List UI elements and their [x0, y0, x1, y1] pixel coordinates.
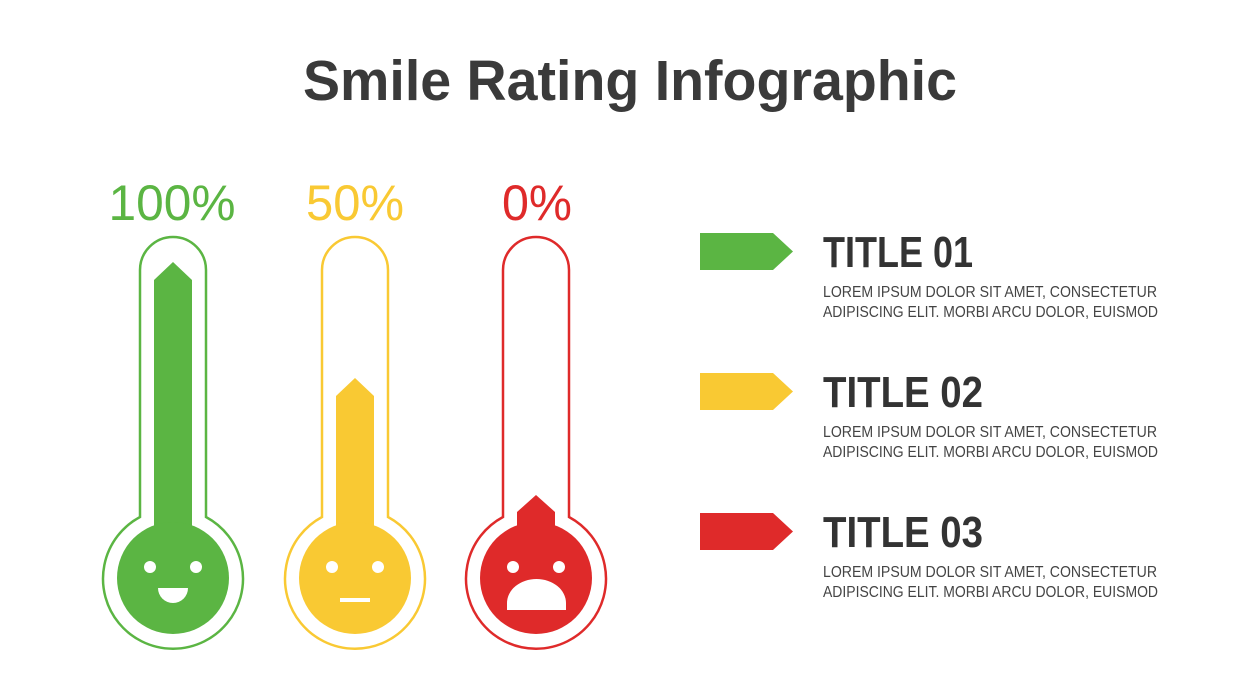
icon: neutral face	[326, 561, 384, 602]
item: title 01	[700, 228, 1158, 321]
item: title 02	[700, 368, 1158, 461]
item: title 03	[700, 508, 1158, 601]
label: 100%: 100%	[108, 175, 236, 231]
thermometer: green 100%	[103, 175, 243, 649]
item: title 03: ADIPISCING ELIT. MORBI ARCU DOLOR, EUISMOD	[823, 584, 1158, 601]
item: title 03: TITLE 03	[823, 508, 983, 557]
item: title 02: TITLE 02	[823, 368, 983, 417]
item: title 02: ADIPISCING ELIT. MORBI ARCU DOLOR, EUISMOD	[823, 444, 1158, 461]
item: title 01: TITLE 01	[823, 228, 973, 277]
icon: sad face	[507, 561, 566, 610]
icon: happy face	[144, 561, 202, 603]
title: Smile Rating Infographic	[303, 49, 957, 113]
thermometer: yellow 50%	[285, 175, 425, 649]
arrow: green	[700, 233, 793, 270]
arrow: red	[700, 513, 793, 550]
item: title 02: LOREM IPSUM DOLOR SIT AMET, CONSECTETUR	[823, 424, 1157, 441]
item: title 01: ADIPISCING ELIT. MORBI ARCU DOLOR, EUISMOD	[823, 304, 1158, 321]
thermometer: red 0%	[466, 175, 606, 649]
item: title 01: LOREM IPSUM DOLOR SIT AMET, CONSECTETUR	[823, 284, 1157, 301]
arrow: yellow	[700, 373, 793, 410]
label: 0%: 0%	[502, 175, 572, 231]
item: title 03: LOREM IPSUM DOLOR SIT AMET, CONSECTETUR	[823, 564, 1157, 581]
label: 50%: 50%	[306, 175, 404, 231]
